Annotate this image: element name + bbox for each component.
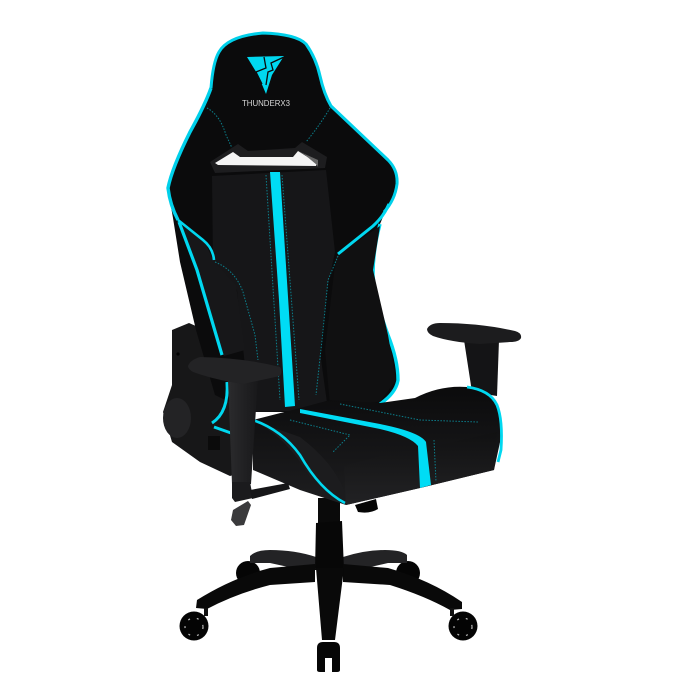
cyan seat piping left: [253, 420, 345, 503]
seat cushion: [253, 387, 502, 505]
right armrest: [427, 323, 521, 396]
headrest logo: [242, 56, 290, 108]
harness slot: [210, 142, 327, 173]
seat front panel: [344, 432, 497, 505]
left armrest: [188, 357, 290, 502]
seat underside knob: [355, 499, 378, 513]
back caster wheels: [236, 561, 420, 585]
central cyan stripe: [270, 172, 295, 407]
base front legs: [196, 564, 462, 640]
cyan bolster piping right: [338, 204, 389, 254]
cyan seat edge right: [467, 387, 502, 462]
height adjustment lever: [231, 501, 251, 526]
gas lift column: [315, 498, 344, 570]
cyan lower left curve: [212, 382, 231, 433]
cyan upper bolster piping left: [178, 220, 214, 260]
cyan outer piping: [211, 33, 397, 212]
brand wordmark: THUNDERX3: [242, 99, 290, 108]
base rear legs: [250, 550, 407, 568]
seat carbon side panel: [253, 421, 345, 503]
cyan seat stripe: [300, 409, 431, 488]
cyan lower bolster piping left: [179, 222, 222, 355]
chair back shell: [168, 32, 398, 433]
front caster wheels: [180, 608, 478, 672]
side bolster carbon panels: [180, 224, 245, 356]
side recline mechanism: [163, 323, 250, 476]
teal seat stitching: [290, 404, 478, 482]
carbon centre panel: [212, 170, 335, 412]
teal stitching: [207, 108, 338, 400]
